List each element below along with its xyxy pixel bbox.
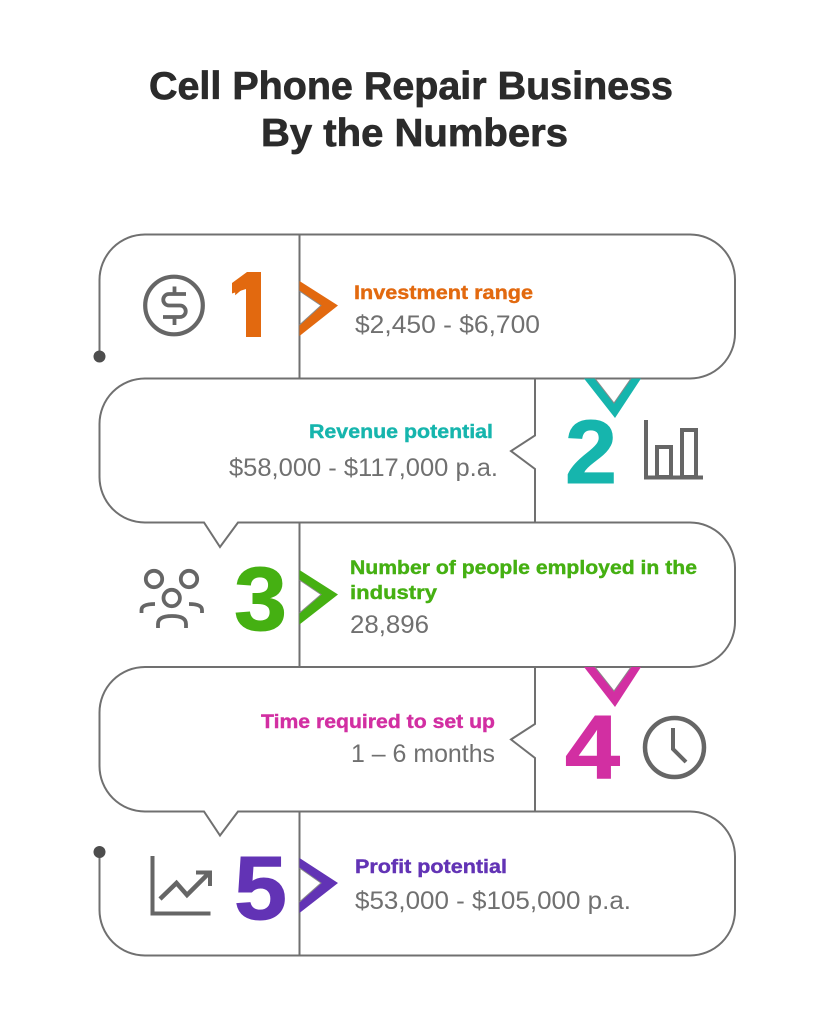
icon: bar chart bbox=[646, 420, 703, 478]
icon: clock bbox=[645, 718, 704, 777]
number 4: 4 bbox=[565, 698, 620, 798]
heading: industry bbox=[350, 582, 437, 604]
value: 28,896 bbox=[350, 611, 429, 639]
icon: growth chart bbox=[152, 856, 210, 914]
heading: Revenue potential bbox=[309, 421, 493, 443]
timeline start dot bbox=[94, 350, 106, 362]
value: $53,000 - $105,000 p.a. bbox=[355, 887, 631, 915]
chevron arrow bbox=[300, 858, 338, 913]
panel: step 1 investment range bbox=[145, 256, 540, 356]
serpentine timeline outline bbox=[100, 234, 735, 956]
title bbox=[149, 65, 673, 155]
number 3: 3 bbox=[234, 550, 287, 650]
number 2: 2 bbox=[565, 403, 617, 503]
timeline end dot bbox=[94, 846, 106, 858]
icon: dollar coin bbox=[145, 277, 203, 334]
icon: people group bbox=[142, 571, 202, 628]
panel: step 2 revenue potential bbox=[229, 378, 703, 503]
chevron arrow bbox=[300, 570, 338, 624]
heading: Investment range bbox=[354, 282, 533, 304]
chevron arrow bbox=[300, 281, 338, 336]
heading: Number of people employed in the bbox=[350, 557, 697, 579]
value: $58,000 - $117,000 p.a. bbox=[229, 454, 498, 482]
title: By the Numbers bbox=[261, 112, 568, 155]
number 5: 5 bbox=[234, 839, 287, 939]
number 1: 1 bbox=[231, 256, 268, 356]
panel: step 5 profit potential bbox=[152, 839, 631, 939]
value: 1 – 6 months bbox=[351, 740, 495, 768]
panel: step 4 time to set up bbox=[261, 667, 704, 798]
heading: Profit potential bbox=[355, 856, 507, 878]
heading bbox=[350, 557, 697, 604]
chevron arrow bbox=[584, 667, 641, 707]
title: Cell Phone Repair Business bbox=[149, 65, 673, 108]
value: $2,450 - $6,700 bbox=[355, 311, 540, 339]
heading: Time required to set up bbox=[261, 711, 495, 733]
panel: step 3 people employed bbox=[142, 550, 697, 650]
chevron arrow bbox=[584, 378, 641, 418]
